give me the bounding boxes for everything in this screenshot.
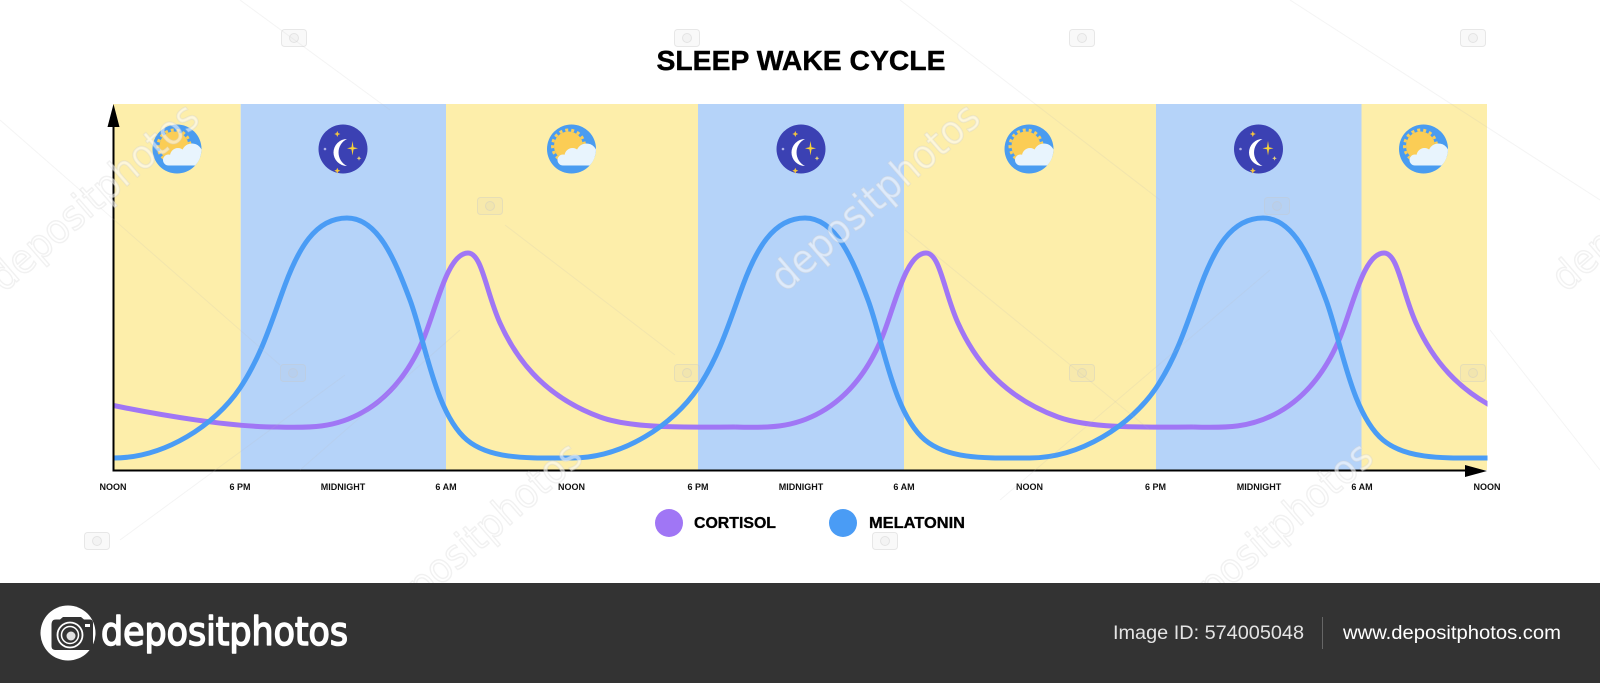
time axis labels: 6 PM <box>1145 482 1166 492</box>
website url: www.depositphotos.com <box>1342 622 1561 644</box>
time axis labels: MIDNIGHT <box>1237 482 1282 492</box>
watermark overlay: depositphotos <box>1154 433 1382 640</box>
icon: moon and stars <box>776 124 826 174</box>
legend: cortisol: CORTISOL <box>694 515 776 532</box>
cortisol curve <box>114 253 1600 427</box>
legend: melatonin <box>829 509 965 537</box>
watermark overlay: depositphotos <box>363 433 591 640</box>
time axis labels: NOON <box>100 482 126 492</box>
time axis labels: 6 AM <box>435 482 457 492</box>
watermark overlay: depositphotos <box>761 94 989 301</box>
time axis labels: MIDNIGHT <box>321 482 366 492</box>
time axis labels: NOON <box>1474 482 1500 492</box>
icon: sun and cloud <box>547 124 598 174</box>
time axis labels: 6 PM <box>687 482 709 492</box>
logo wordmark: depositphotos <box>101 610 348 655</box>
footer bar <box>0 583 1600 683</box>
time axis labels: MIDNIGHT <box>779 482 824 492</box>
title: SLEEP WAKE CYCLE <box>656 45 946 76</box>
time axis labels: 6 AM <box>1351 482 1373 492</box>
time axis labels: 6 PM <box>229 482 251 492</box>
chart: hormone curves <box>114 218 1600 458</box>
icon: sun and cloud <box>152 124 203 174</box>
icon: moon and stars <box>1234 124 1283 174</box>
melatonin curve <box>114 218 1488 458</box>
icon: moon and stars <box>318 124 368 174</box>
icon: sun and cloud <box>1004 124 1055 174</box>
legend: melatonin: MELATONIN <box>869 515 965 532</box>
time axis labels: NOON <box>1016 482 1043 492</box>
axes with arrows <box>108 104 1487 477</box>
icon: depositphotos camera logo <box>40 606 96 660</box>
image id: Image ID: 574005048 <box>1113 622 1304 644</box>
time axis labels: NOON <box>558 482 585 492</box>
icon: sun and cloud <box>1399 124 1450 174</box>
panel: chart background bands <box>113 104 1487 470</box>
icon row: day and night <box>152 124 1450 174</box>
time axis labels: 6 AM <box>893 482 915 492</box>
legend <box>655 509 965 537</box>
legend: cortisol <box>655 509 776 537</box>
time axis labels <box>100 482 1500 492</box>
